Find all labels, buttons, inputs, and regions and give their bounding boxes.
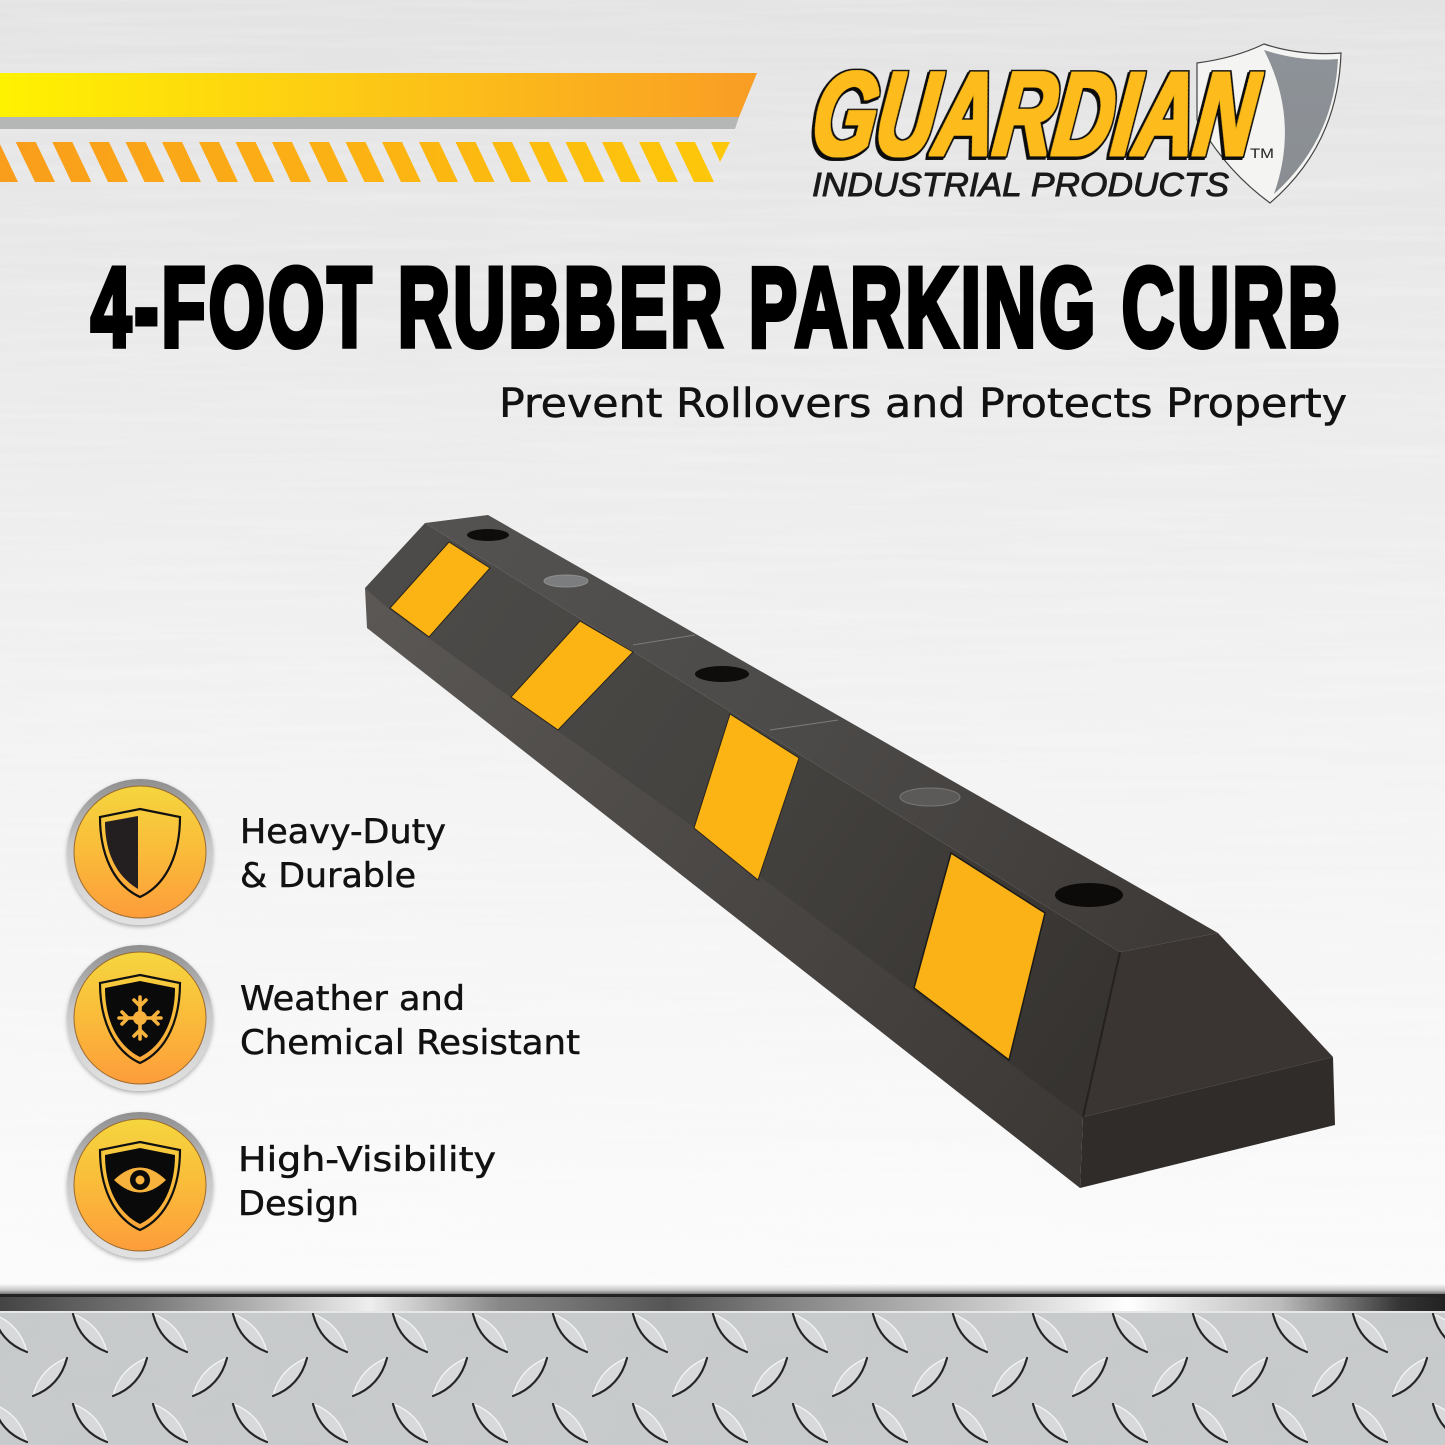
curb top face — [425, 515, 1218, 952]
filled hole 4 — [900, 788, 960, 806]
reflective stripe 1 — [390, 542, 490, 637]
logo wordmark: GUARDIAN — [806, 48, 1266, 181]
curb end vertical face — [1080, 1057, 1335, 1188]
feature: high-visibility design — [67, 1112, 507, 1258]
feature: heavy-duty and durable — [67, 779, 457, 925]
diamond plate — [0, 1313, 1445, 1445]
filled hole 2 — [544, 575, 588, 587]
icon: half-filled shield badge — [67, 779, 213, 925]
yellow bar — [0, 73, 757, 117]
product: rubber parking curb — [365, 515, 1335, 1188]
reflective stripe 2 — [511, 621, 633, 730]
subtitle: Prevent Rollovers and Protects Property — [499, 381, 1347, 427]
decorative top bars — [0, 73, 757, 182]
icon: eye shield badge — [67, 1112, 213, 1258]
label: Weather and — [240, 979, 465, 1019]
hazard stripes — [0, 142, 730, 182]
mounting hole 3 — [695, 666, 749, 682]
curb base side — [365, 588, 1083, 1188]
reflective stripe 4 — [914, 853, 1045, 1060]
footer: metal band and diamond plate — [0, 1284, 1445, 1445]
reflective stripe 3 — [694, 714, 799, 880]
label: Chemical Resistant — [240, 1023, 580, 1063]
logo: Guardian Industrial Products — [806, 44, 1341, 203]
logo tagline: INDUSTRIAL PRODUCTS — [812, 166, 1229, 203]
curb end slanted face — [1083, 933, 1333, 1117]
label: & Durable — [240, 856, 416, 896]
icon: snowflake shield badge — [67, 945, 213, 1091]
label: Heavy-Duty — [240, 812, 446, 852]
label: High-Visibility — [238, 1140, 496, 1180]
mounting hole 5 — [1055, 883, 1123, 907]
icon: shield — [1197, 44, 1341, 203]
feature: weather and chemical resistant — [67, 945, 580, 1091]
curb slanted side — [365, 523, 1120, 1117]
logo trademark: TM — [1250, 145, 1274, 161]
mounting hole 1 — [467, 529, 509, 541]
gray bar shadow — [0, 117, 739, 129]
label: Design — [238, 1184, 359, 1224]
